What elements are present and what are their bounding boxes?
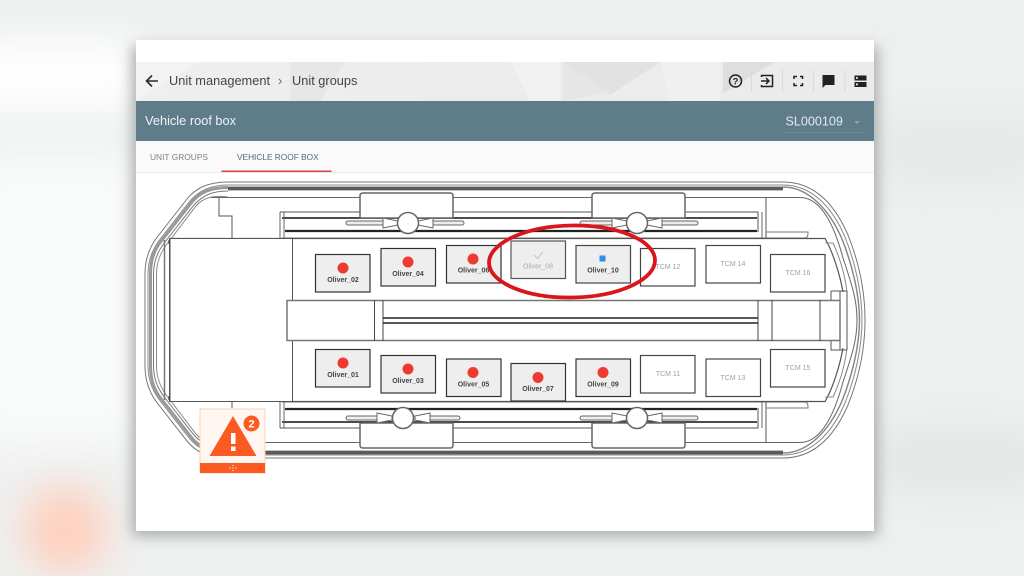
roller top right — [580, 212, 698, 234]
unit Oliver_10 — [576, 246, 630, 283]
breadcrumb: Unit groups — [292, 73, 357, 88]
unit Oliver_04: Oliver_04 — [392, 271, 424, 278]
centre strip — [287, 291, 847, 350]
unit selector: SL000109 — [786, 114, 843, 128]
unit Oliver_06 — [446, 246, 501, 283]
unit TCM 12 — [640, 248, 695, 286]
unit Oliver_03 — [381, 356, 436, 393]
icon: chat — [822, 75, 834, 88]
unit TCM 15 — [770, 350, 825, 387]
unit Oliver_09: Oliver_09 — [587, 382, 619, 388]
roof platform — [170, 232, 847, 408]
active tab underline — [222, 170, 332, 172]
icon: move handle — [230, 465, 236, 471]
unit TCM 11: TCM 11 — [656, 371, 680, 378]
roller top left — [346, 212, 464, 234]
unit Oliver_04 — [381, 248, 436, 286]
unit Oliver_08 — [511, 241, 566, 278]
icon: help: ? — [733, 76, 739, 88]
unit TCM 15: TCM 15 — [786, 365, 811, 372]
alert count: 2 — [248, 418, 255, 430]
unit selector — [785, 114, 864, 132]
icon: warning triangle — [210, 416, 256, 456]
unit Oliver_01: Oliver_01 — [327, 372, 359, 379]
unit Oliver_03: Oliver_03 — [392, 378, 424, 385]
roller bottom right — [580, 408, 698, 428]
unit Oliver_02 — [316, 254, 370, 292]
tab bar — [136, 141, 874, 172]
vehicle outer body — [145, 182, 865, 458]
left end frame — [219, 197, 766, 443]
unit Oliver_06: Oliver_06 — [458, 268, 489, 274]
upper rail — [280, 193, 762, 238]
panel shadow — [132, 46, 878, 536]
breadcrumb: Unit management — [169, 73, 270, 88]
unit Oliver_05: Oliver_05 — [458, 382, 489, 388]
title: Vehicle roof box — [145, 113, 237, 128]
unit Oliver_07 — [511, 364, 566, 401]
roller bottom left — [346, 408, 460, 428]
unit Oliver_09 — [576, 359, 630, 396]
unit Oliver_02: Oliver_02 — [327, 277, 359, 284]
icon: back arrow — [146, 76, 158, 86]
top bar — [136, 62, 874, 101]
tab: unit groups: UNIT GROUPS — [150, 152, 208, 162]
icon: login — [761, 76, 772, 86]
warning badge — [200, 409, 265, 473]
lower rail — [280, 402, 762, 448]
vehicle roof plan — [145, 182, 865, 458]
unit TCM 16 — [770, 254, 825, 292]
icon: help — [730, 75, 742, 88]
icon: fullscreen — [794, 76, 802, 86]
tab: vehicle roof box: VEHICLE ROOF BOX — [237, 152, 319, 162]
unit Oliver_01 — [316, 350, 370, 387]
application window — [136, 40, 874, 531]
icon: server list — [854, 76, 866, 87]
unit TCM 14: TCM 14 — [721, 261, 746, 268]
red highlight ellipse — [488, 224, 656, 299]
unit cards — [316, 241, 825, 401]
breadcrumb: › — [278, 73, 282, 88]
unit TCM 11 — [640, 356, 695, 393]
unit Oliver_07: Oliver_07 — [522, 386, 554, 393]
unit Oliver_10: Oliver_10 — [587, 268, 619, 274]
unit TCM 13: TCM 13 — [721, 375, 746, 382]
unit TCM 13 — [706, 359, 760, 396]
unit Oliver_05 — [446, 359, 501, 396]
unit TCM 12: TCM 12 — [656, 264, 681, 271]
title bar — [136, 101, 874, 141]
unit TCM 16: TCM 16 — [786, 270, 811, 277]
unit Oliver_08: Oliver_08 — [523, 264, 553, 270]
unit TCM 14 — [706, 246, 760, 283]
